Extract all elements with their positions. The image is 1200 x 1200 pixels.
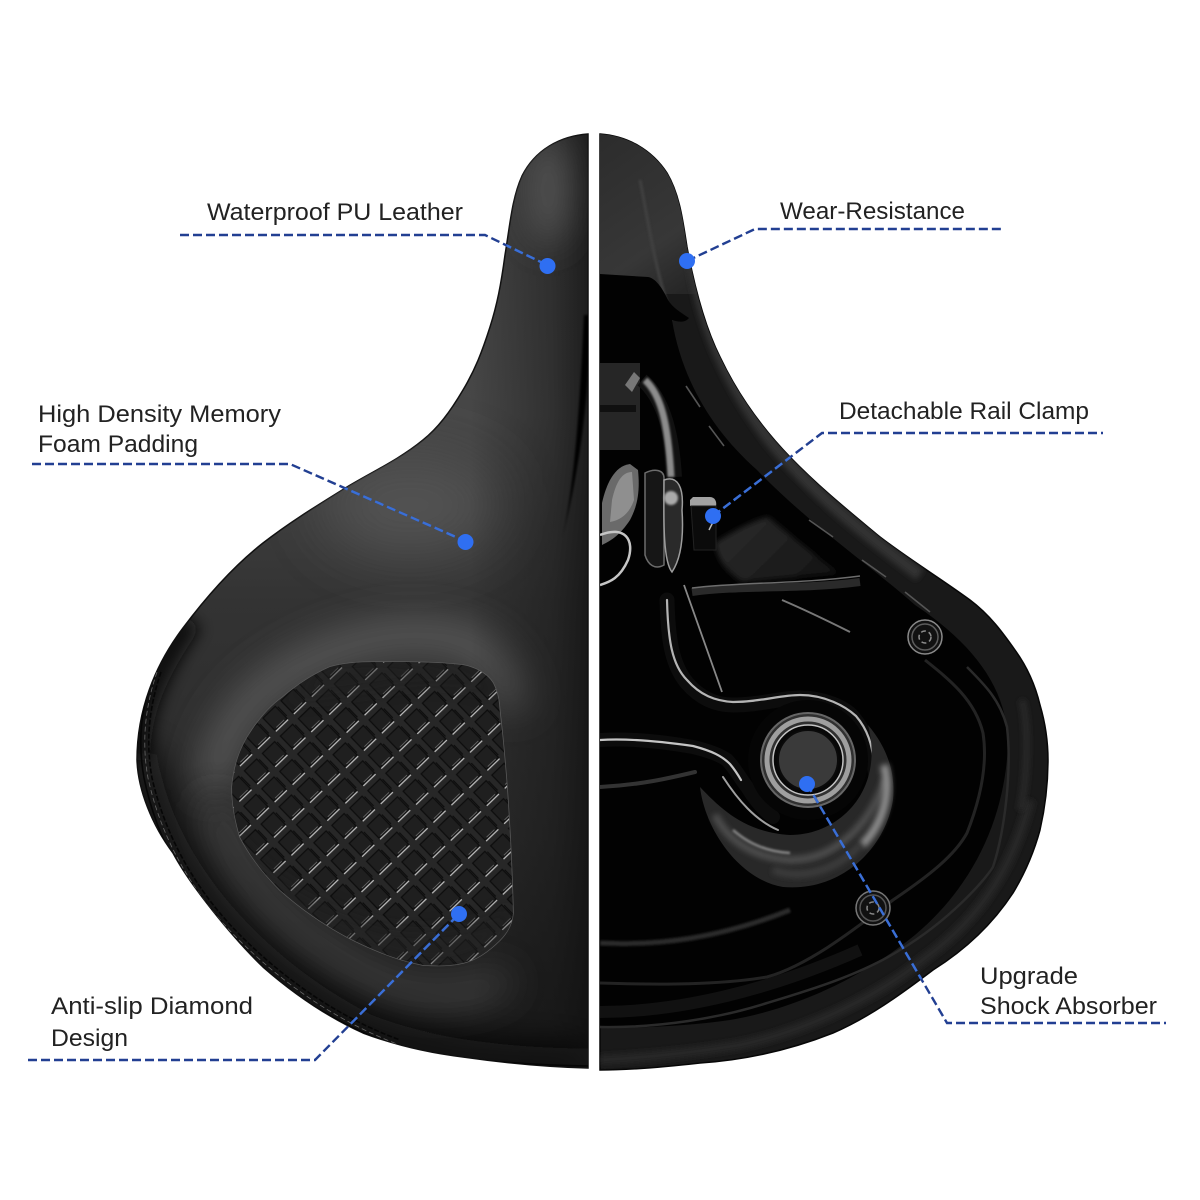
callout: Wear-Resistance <box>679 198 1003 269</box>
callout: High Density Memory Foam Padding: Foam Padding <box>38 431 198 458</box>
callout: Upgrade Shock Absorber <box>799 776 1166 1023</box>
halo around grip patch <box>215 635 515 790</box>
screw: upper <box>908 620 942 654</box>
callout: Wear-Resistance: Wear-Resistance <box>780 198 965 225</box>
screw: lower <box>856 891 890 925</box>
stitching <box>141 672 588 1066</box>
grip patch: anti-slip diamond texture <box>231 661 514 966</box>
callout: Anti-slip Diamond Design <box>28 906 467 1060</box>
rail clamp assembly <box>600 363 716 585</box>
inner ribs <box>600 667 1009 1027</box>
callout: Anti-slip Diamond Design: Anti-slip Diamond <box>51 993 253 1020</box>
slot marks along edge <box>686 386 930 612</box>
shock absorber <box>700 700 893 887</box>
callout: Waterproof PU Leather: Waterproof PU Leather <box>207 199 463 226</box>
callout: Waterproof PU Leather <box>180 199 556 274</box>
callout: High Density Memory Foam Padding: High Density Memory <box>38 401 281 428</box>
callout: Detachable Rail Clamp <box>705 398 1103 524</box>
panel: seat underside (right) <box>600 134 1048 1070</box>
cross brace rails <box>684 576 860 692</box>
callout: Detachable Rail Clamp: Detachable Rail Clamp <box>839 398 1089 425</box>
callout: Upgrade Shock Absorber: Shock Absorber <box>980 993 1157 1020</box>
fold crease <box>566 314 588 518</box>
spring rail <box>600 600 877 830</box>
lower dark rim highlight <box>600 800 1030 1060</box>
callout: High Density Memory Foam Padding <box>32 401 474 550</box>
callout: Upgrade Shock Absorber: Upgrade <box>980 963 1078 990</box>
infographic: bicycle seat cutaway <box>28 133 1166 1071</box>
panel: seat top half (left) <box>137 134 590 1074</box>
callout: Anti-slip Diamond Design: Design <box>51 1025 128 1052</box>
interior cavity <box>600 274 1008 1028</box>
interior plate <box>715 517 838 582</box>
